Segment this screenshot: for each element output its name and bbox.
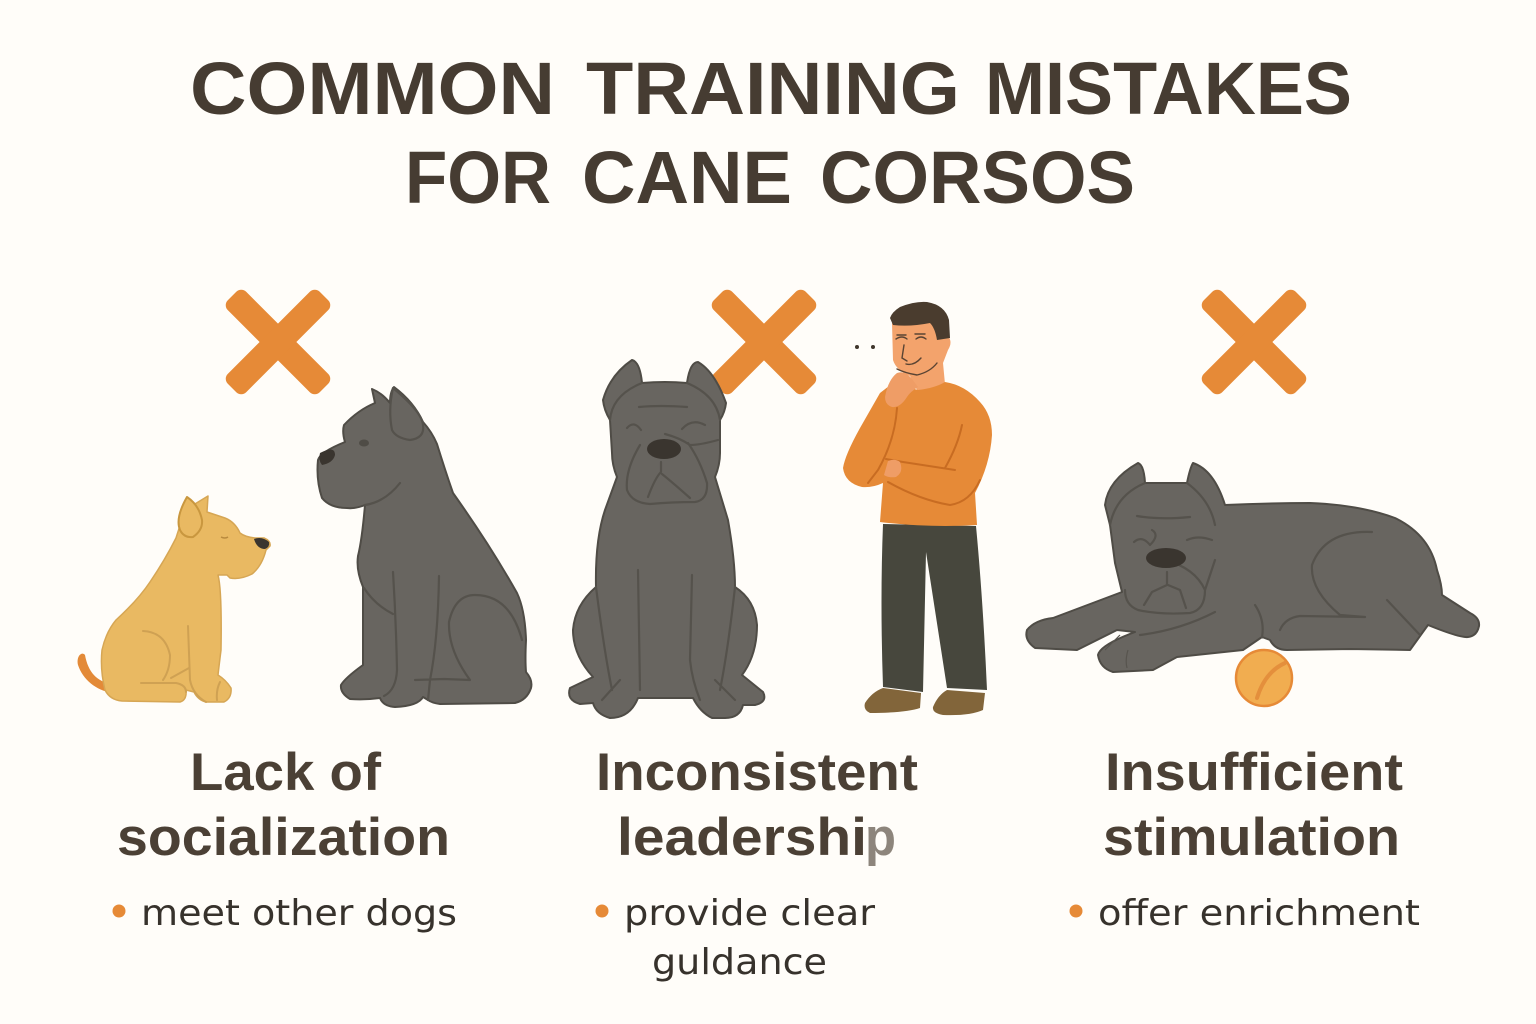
hands: [884, 372, 918, 477]
bullet: provide clear guidance: provide clear: [624, 893, 875, 934]
bullet: provide clear guidance: guldance: [652, 942, 827, 983]
title: TRAINING: [586, 47, 960, 130]
heading: inconsistent leadership: [596, 743, 918, 867]
heading: inconsistent leadership: p: [865, 808, 896, 867]
heading: inconsistent leadership: leadershi: [617, 808, 867, 867]
illustration: large grey dog in profile: [318, 387, 531, 707]
face details: [896, 334, 937, 375]
illustration: lying grey dog: [1026, 463, 1479, 672]
bullet: meet other dogs: meet other dogs: [141, 893, 457, 934]
hair: [890, 302, 950, 340]
title: FOR: [405, 136, 551, 219]
title: CANE: [582, 136, 792, 219]
trousers: [882, 524, 987, 692]
heading: lack of socialization: socialization: [117, 808, 450, 867]
sweater: [843, 382, 992, 526]
title: CORSOS: [820, 136, 1135, 219]
title: [190, 47, 1352, 219]
illustration: large grey dog facing front: [569, 360, 764, 718]
thinking dots: [855, 345, 875, 349]
bullet: offer enrichment: offer enrichment: [1098, 893, 1420, 934]
title: COMMON: [190, 47, 555, 130]
heading: inconsistent leadership: Inconsistent: [596, 743, 918, 802]
heading: lack of socialization: [117, 743, 450, 867]
illustration: thinking man: [843, 302, 992, 715]
heading: insufficient stimulation: Insufficient: [1105, 743, 1403, 802]
icon: orange ball: [1236, 650, 1292, 706]
icon: X mark, inconsistent leadership: [709, 287, 819, 397]
heading: insufficient stimulation: [1103, 743, 1403, 867]
neck and face: [892, 320, 950, 392]
title: MISTAKES: [985, 47, 1352, 130]
shoes: [865, 688, 985, 715]
illustration: small yellow dog: [78, 496, 270, 702]
heading: lack of socialization: Lack of: [190, 743, 381, 802]
icon: X mark, lack of socialization: [223, 287, 333, 397]
bullet: provide clear guidance: [596, 893, 875, 983]
icon: X mark, insufficient stimulation: [1199, 287, 1309, 397]
heading: insufficient stimulation: stimulation: [1103, 808, 1400, 867]
